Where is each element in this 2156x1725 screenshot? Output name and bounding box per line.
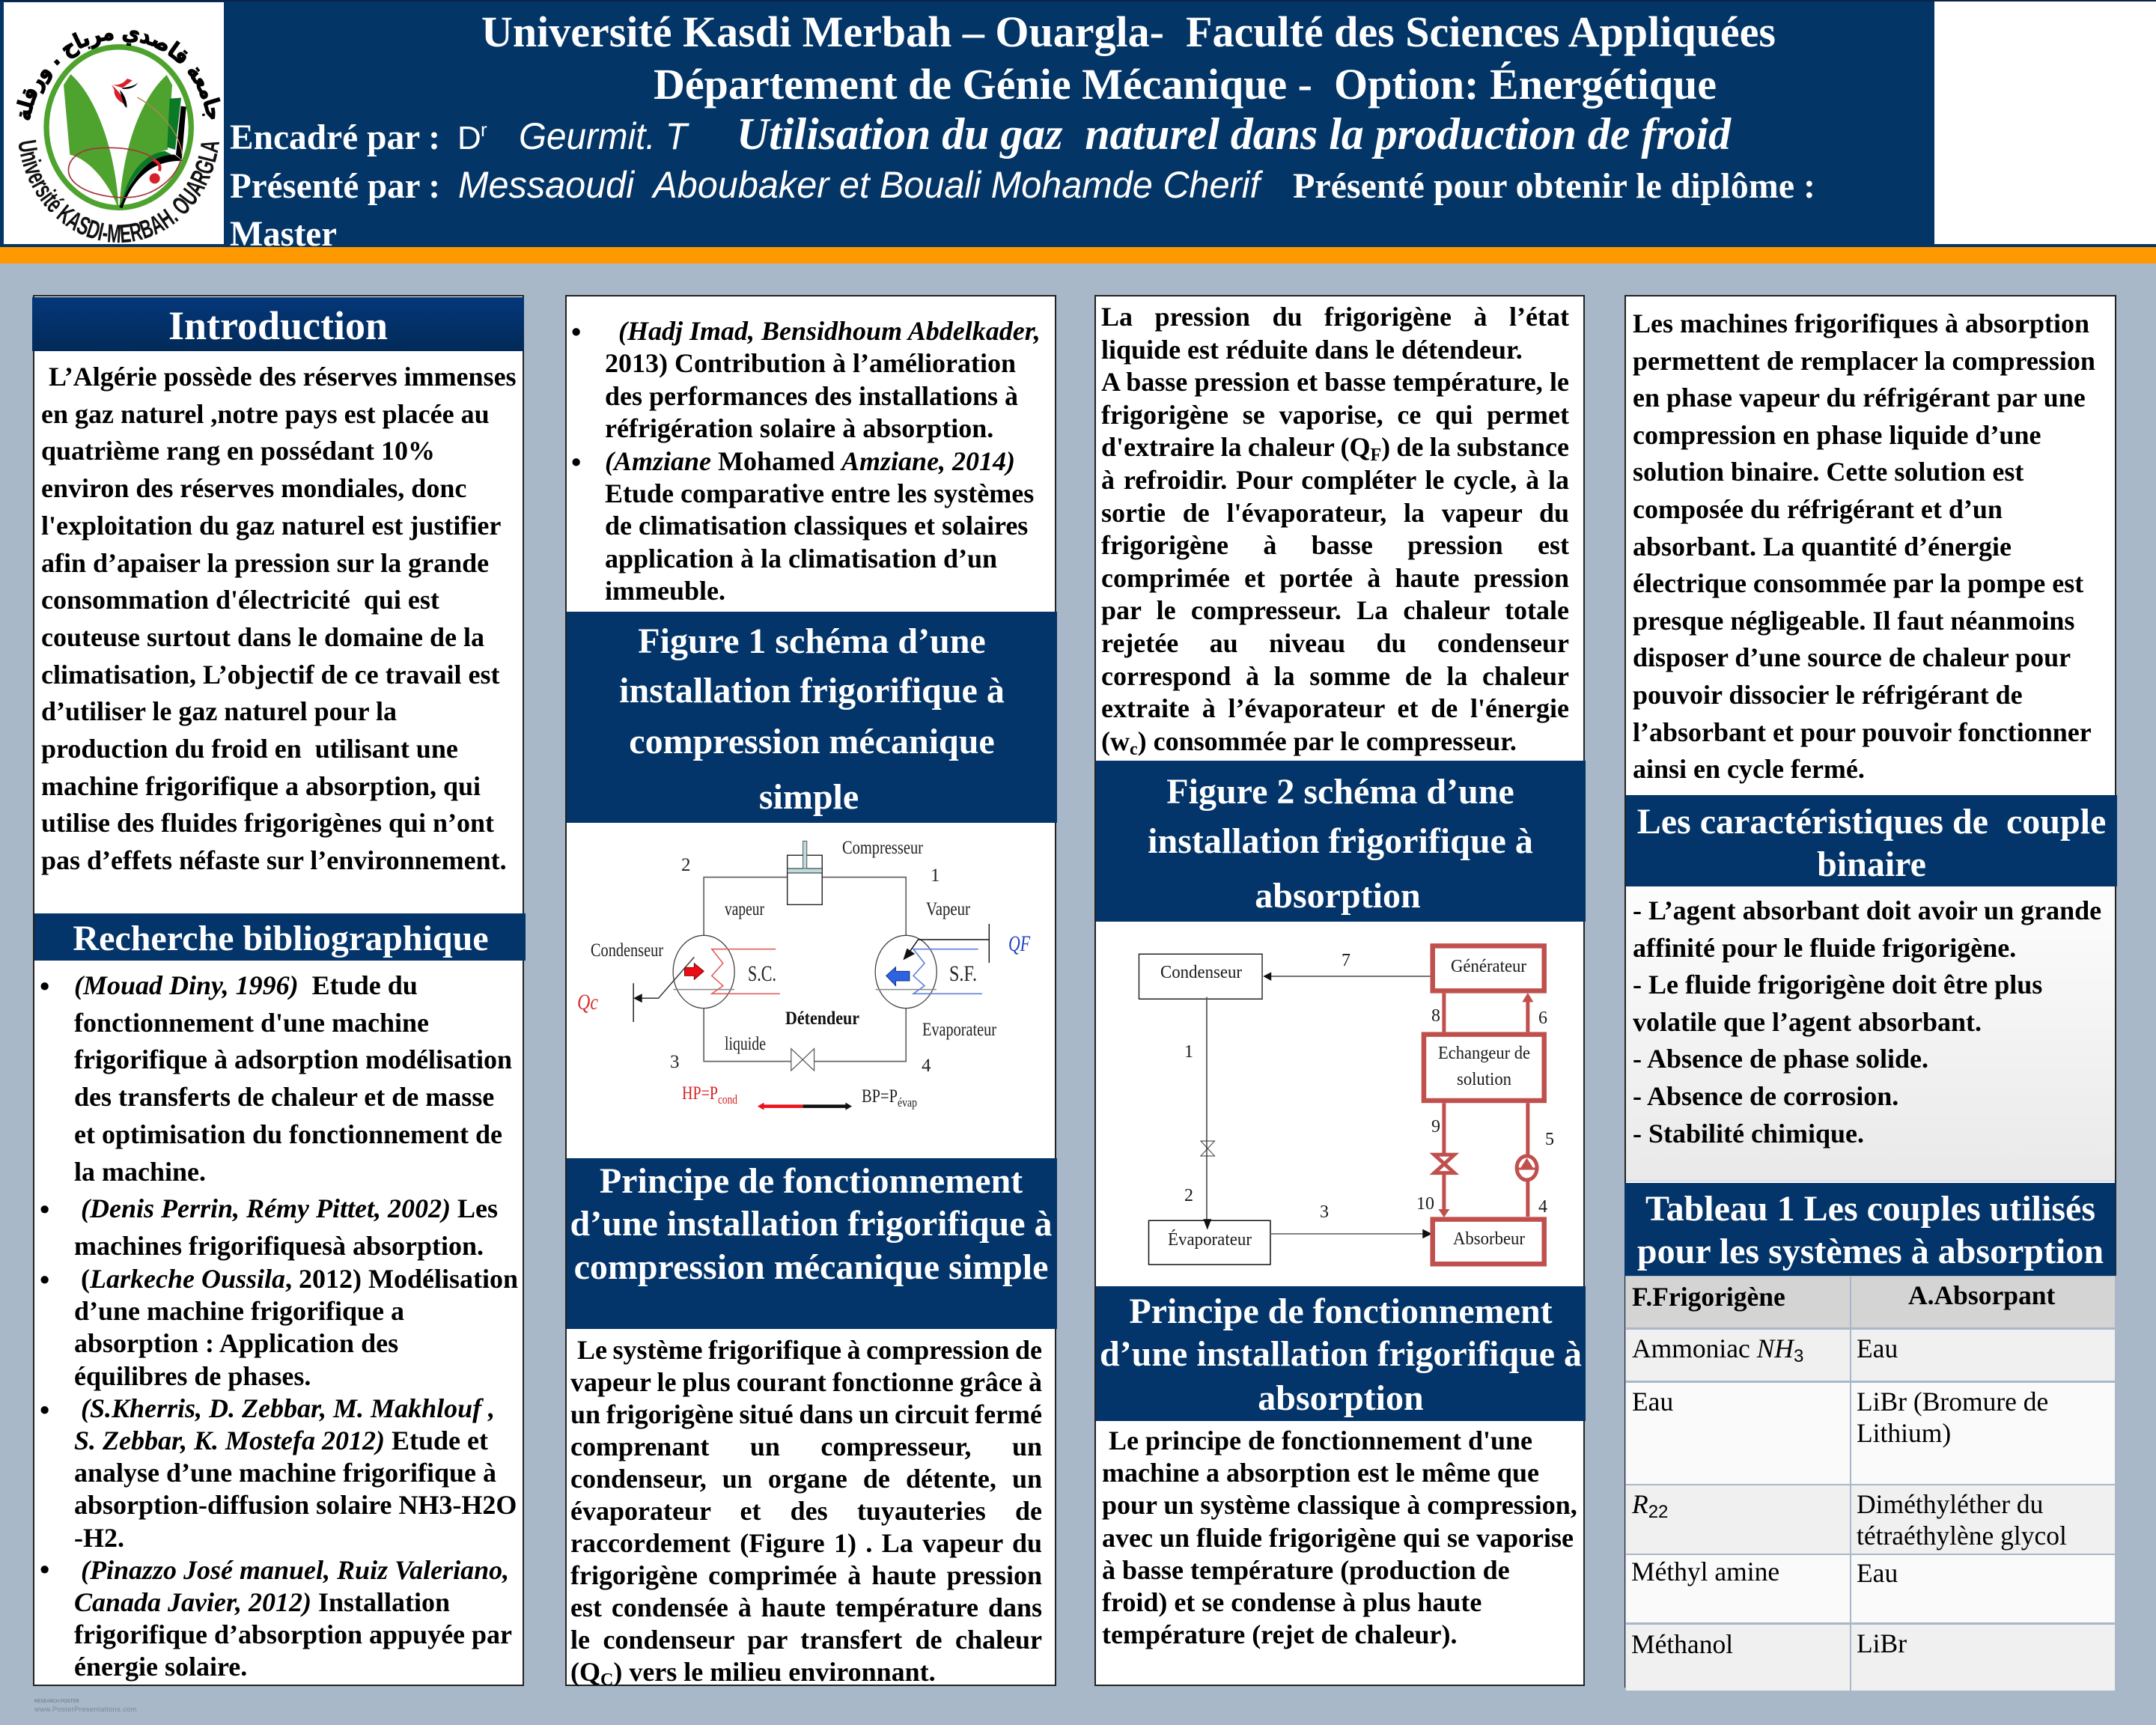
text: introduction paragraph: l'exploitation du gaz naturel est justifier (41, 511, 501, 541)
table: refrigerant and absorbent couples: Eau (1857, 1558, 1898, 1588)
diagram: absorption refrigeration installation: 3 (1320, 1202, 1329, 1222)
text: principle of absorption: Le principe de fonctionnement d'une (1109, 1426, 1532, 1455)
text: introduction paragraph: afin d’apaiser la pression sur la grande (41, 548, 489, 578)
text: references continued: (Amziane Mohamed Amziane, 2014) (605, 446, 1015, 476)
text: absorption machines: disposer d’une source de chaleur pour (1633, 642, 2071, 672)
heading: Introduction: Introduction (168, 303, 388, 348)
table: refrigerant and absorbent couples: Diméthyléther du (1857, 1489, 2043, 1519)
text: introduction paragraph: couteuse surtout dans le domaine de la (41, 622, 484, 652)
text: references continued: des performances des installations à (605, 381, 1018, 411)
text: bibliography references part 1: fonctionnement d'une machine (74, 1008, 429, 1038)
text: principle of compression: est condensée à haute température dans (570, 1592, 1042, 1622)
text: bibliography references part 2: absorption-diffusion solaire NH3-H2O (74, 1490, 517, 1520)
text: binary couple characteristics: - Absence de corrosion. (1633, 1081, 1898, 1111)
heading: Principe compression: d’une installation frigorifique à (570, 1204, 1053, 1244)
diagram: compression refrigeration installation: Compresseur (842, 838, 924, 858)
text: principle of absorption: température (rejet de chaleur). (1102, 1619, 1457, 1649)
text: absorption machines: absorbant. La quantité d’énergie (1633, 532, 2012, 562)
text: principle of absorption: pour un système classique à compression, (1102, 1490, 1577, 1520)
text: refrigeration cycle: A basse pression et basse température, le (1101, 367, 1569, 397)
text: binary couple characteristics: affinité pour le fluide frigorigène. (1633, 933, 2016, 963)
text: bibliography references part 1: machines frigorifiquesà absorption. (74, 1231, 484, 1261)
text: bibliography references part 2: équilibres de phases. (74, 1361, 311, 1391)
text: principle of absorption: à basse température (production de (1102, 1555, 1510, 1585)
table: refrigerant and absorbent couples: Méthyl amine (1631, 1557, 1779, 1586)
text: refrigeration cycle: frigorigène se vaporise, ce qui permet (1101, 400, 1569, 430)
text: refrigeration cycle: rejetée au niveau du condenseur (1101, 628, 1569, 658)
header text lines: Utilisation du gaz naturel dans la production de froid (737, 109, 1732, 159)
text: refrigeration cycle: sortie de l'évaporateur, la vapeur du (1101, 498, 1569, 528)
text: bibliography references part 2: analyse d’une machine frigorifique à (74, 1458, 496, 1488)
bullets: references: • (571, 317, 581, 348)
text: refrigeration cycle: (wc) consommée par le compresseur. (1101, 726, 1517, 759)
text: bibliography references part 2 (74, 1264, 518, 1682)
text: absorption machines: presque négligeable. Il faut néanmoins (1633, 606, 2074, 636)
heading: Figure 1: Figure 1 schéma d’une (638, 621, 986, 661)
text: references continued (605, 316, 1041, 606)
table: refrigerant and absorbent couples: LiBr (Bromure de (1857, 1387, 2048, 1417)
text: introduction paragraph: consommation d'électricité qui est (41, 585, 439, 615)
table: refrigerant and absorbent couples: Ammoniac NH3 (1632, 1333, 1803, 1366)
text: absorption machines: Les machines frigorifiques à absorption (1633, 308, 2089, 338)
bullets: bibliography markers: • (40, 971, 49, 1003)
header text lines: Présenté pour obtenir le diplôme : (1293, 166, 1815, 206)
text: binary couple characteristics: - L’agent absorbant doit avoir un grande (1633, 895, 2101, 925)
header text lines: r (481, 118, 487, 141)
text: binary couple characteristics (1626, 886, 2115, 1181)
bullets: bibliography markers: • (40, 1554, 49, 1586)
text: introduction paragraph: production du froid en utilisant une (41, 734, 458, 764)
footer: poster credit: www.PosterPresentations.com (34, 1706, 137, 1714)
heading: Figure 2: Figure 2 schéma d’une (1166, 772, 1514, 812)
text: introduction paragraph: en gaz naturel ,notre pays est placée au (41, 399, 490, 429)
footer: poster credit (34, 1700, 137, 1714)
text: principle of absorption: froid) et se condense à plus haute (1102, 1587, 1482, 1617)
diagram: absorption refrigeration installation: 2 (1184, 1186, 1193, 1205)
text: introduction paragraph: machine frigorifique a absorption, qui (41, 771, 481, 801)
table: refrigerant and absorbent couples: Eau (1632, 1387, 1673, 1417)
bullets: references: • (571, 447, 581, 478)
diagram: absorption refrigeration installation: 4 (1538, 1197, 1547, 1217)
diagram: compression refrigeration installation: évap (898, 1095, 917, 1110)
text: refrigeration cycle: par le compresseur. La chaleur totale (1101, 595, 1569, 625)
text: bibliography references part 2: (Pinazzo José manuel, Ruiz Valeriano, (81, 1555, 509, 1585)
heading: Tableau 1 (1624, 1183, 2116, 1276)
text: refrigeration cycle: correspond à la somme de la chaleur (1101, 661, 1569, 691)
text: principle of compression: comprenant un compresseur, un (570, 1432, 1042, 1461)
text: introduction paragraph: quatrième rang en possédant 10% (41, 436, 435, 466)
diagram: absorption refrigeration installation: 5 (1545, 1130, 1554, 1149)
bullets: references (571, 317, 581, 478)
diagram: compression refrigeration installation: cond (718, 1092, 737, 1107)
bullets: bibliography markers: • (40, 1194, 49, 1226)
text: absorption machines: ainsi en cycle fermé. (1633, 754, 1865, 784)
panel: figure 1 compression (565, 295, 1056, 1686)
text: refrigeration cycle: La pression du frigorigène à l’état (1101, 302, 1569, 332)
text: bibliography references part 2: (Larkeche Oussila, 2012) Modélisation (81, 1264, 518, 1294)
text: principle of compression: (QC) vers le milieu environnant. (570, 1657, 936, 1690)
diagram: compression refrigeration installation: 2 (681, 855, 690, 875)
diagram: absorption refrigeration installation: 10 (1416, 1194, 1434, 1214)
text: principle of absorption (1102, 1426, 1577, 1649)
text: bibliography references part 1: frigorifique à adsorption modélisation (74, 1044, 512, 1074)
panel: binary couple and table (1624, 295, 2116, 1688)
text: references continued: immeuble. (605, 576, 725, 606)
header text lines: Messaoudi Aboubaker et Bouali Mohamde Cherif (458, 164, 1264, 206)
heading: Figure 2 (1096, 761, 1586, 922)
heading: Principe compression: Principe de fonctionnement (600, 1161, 1023, 1201)
diagram: compression refrigeration installation: QF (1008, 931, 1030, 956)
diagram: absorption refrigeration installation: Echangeur de (1438, 1044, 1530, 1063)
heading: Recherche bibliographique: Recherche bibliographique (73, 919, 489, 958)
logo: Université Kasdi Merbah Ouargla: جامعة قاصدي مرباح . ورقلة (16, 30, 221, 121)
text: bibliography references part 2: S. Zebbar, K. Mostefa 2012) Etude et (74, 1426, 488, 1455)
text: bibliography references part 2: énergie solaire. (74, 1652, 247, 1682)
heading: Figure 1 (567, 612, 1057, 823)
text: references continued: application à la climatisation d’un (605, 544, 997, 574)
text: references continued: (Hadj Imad, Bensidhoum Abdelkader, (618, 316, 1041, 346)
text: references continued: 2013) Contribution à l’amélioration (605, 348, 1016, 378)
text: introduction paragraph: L’Algérie possède des réserves immenses (49, 362, 517, 392)
header text lines: Encadré par : (230, 118, 440, 157)
text: bibliography references part 2: frigorifique d’absorption appuyée par (74, 1619, 512, 1649)
diagram: compression refrigeration installation: Vapeur (926, 899, 971, 919)
text: principle of compression (570, 1335, 1042, 1690)
heading: Principe absorption (1096, 1286, 1586, 1421)
text: principle of compression: Le système frigorifique à compression de (577, 1335, 1042, 1365)
text: introduction paragraph: pas d’effets néfaste sur l’environnement. (41, 845, 507, 875)
diagram: compression refrigeration installation: Qc (577, 990, 598, 1014)
text: refrigeration cycle: liquide est réduite dans le détendeur. (1101, 335, 1523, 365)
header text lines: Présenté par : (230, 166, 440, 206)
header text lines: Geurmit. T (519, 115, 689, 157)
heading: Introduction (32, 297, 524, 351)
bullets: bibliography markers: • (40, 1395, 49, 1426)
text: refrigeration cycle: à refroidir. Pour compléter le cycle, à la (1101, 465, 1569, 495)
diagram: absorption refrigeration installation: 1 (1184, 1042, 1193, 1062)
table: refrigerant and absorbent couples: LiBr (1857, 1628, 1907, 1658)
header text lines: Université Kasdi Merbah – Ouargla- Faculté des Sciences Appliquées (481, 7, 1776, 56)
header banner (0, 0, 2156, 247)
logo: Université Kasdi Merbah Ouargla (4, 2, 224, 244)
diagram: absorption refrigeration installation: 7 (1342, 951, 1350, 970)
text: bibliography references part 1: la machine. (74, 1157, 206, 1187)
text: principle of compression: frigorigène comprimée à haute pression (570, 1560, 1042, 1590)
text: absorption machines: en phase vapeur du réfrigérant par une (1633, 383, 2086, 413)
diagram: absorption refrigeration installation: Condenseur (1160, 963, 1242, 982)
text: absorption machines (1633, 308, 2095, 784)
diagram: absorption refrigeration installation: Évaporateur (1168, 1230, 1252, 1250)
text: principle of compression: vapeur le plus courant fonctionne grâce à (570, 1367, 1042, 1397)
diagram: compression refrigeration installation: Détendeur (785, 1008, 859, 1029)
heading: Figure 1: simple (759, 777, 859, 817)
table: refrigerant and absorbent couples: F.Frigorigène (1632, 1282, 1785, 1312)
table: refrigerant and absorbent couples: R22 (1632, 1489, 1668, 1522)
heading: Principe absorption: d’une installation frigorifique à (1100, 1334, 1582, 1374)
text: principle of absorption: machine a absorption est le même que (1102, 1458, 1539, 1488)
text: absorption machines: pouvoir dissocier le réfrigérant de (1633, 680, 2023, 710)
text: principle of compression: le condenseur par transfert de chaleur (570, 1625, 1042, 1655)
heading: Les caractéristiques (1626, 795, 2117, 886)
text: bibliography references part 2: -H2. (74, 1523, 124, 1553)
panel: introduction and bibliography (33, 295, 524, 1686)
text: binary couple characteristics: volatile que l’agent absorbant. (1633, 1007, 1982, 1037)
text: refrigeration cycle: d'extraire la chaleur (QF) de la substance (1101, 432, 1569, 465)
text: introduction paragraph: d’utiliser le gaz naturel pour la (41, 696, 397, 726)
panel: figure 2 absorption (1094, 295, 1585, 1686)
header text lines: D (457, 120, 481, 156)
diagram: absorption refrigeration installation: 6 (1538, 1008, 1547, 1028)
header text lines: Département de Génie Mécanique - Option: Énergétique (654, 60, 1717, 109)
diagram: compression refrigeration installation: S.F. (949, 961, 977, 986)
text: introduction paragraph: utilise des fluides frigorigènes qui n’ont (41, 808, 494, 838)
text: principle of absorption: avec un fluide frigorigène qui se vaporise (1102, 1523, 1574, 1553)
text: bibliography references part 1: (Mouad Diny, 1996) Etude du (74, 970, 418, 1000)
text: bibliography references part 1: et optimisation du fonctionnement de (74, 1119, 502, 1149)
diagram: compression refrigeration installation: HP=P (682, 1083, 718, 1104)
table: refrigerant and absorbent couples: Lithium) (1857, 1418, 1951, 1448)
diagram: compression refrigeration installation: Evaporateur (922, 1020, 997, 1040)
text: refrigeration cycle: extraite à l’évaporateur et de l'énergie (1101, 693, 1569, 723)
bullets: bibliography markers (40, 971, 49, 1586)
text: bibliography references part 1: des transferts de chaleur et de masse (74, 1082, 494, 1112)
bullets: bibliography markers: • (40, 1265, 49, 1296)
heading: Tableau 1: pour les systèmes à absorption (1637, 1232, 2104, 1271)
text: introduction paragraph: climatisation, L’objectif de ce travail est (41, 660, 500, 690)
text: bibliography references part 2: Canada Javier, 2012) Installation (74, 1587, 450, 1617)
text: bibliography references part 1: (Denis Perrin, Rémy Pittet, 2002) Les (81, 1193, 498, 1223)
diagram: absorption refrigeration installation: Absorbeur (1453, 1229, 1525, 1249)
text: references continued: de climatisation classiques et solaires (605, 511, 1028, 541)
text: absorption machines: l’absorbant et pour pouvoir fonctionner (1633, 717, 2092, 747)
diagram: compression refrigeration installation: Condenseur (591, 940, 664, 961)
text: absorption machines: composée du réfrigérant et d’un (1633, 494, 2003, 524)
heading: Principe compression: compression mécanique simple (574, 1247, 1048, 1287)
text: refrigeration cycle: comprimée et portée à haute pression (1101, 563, 1569, 593)
heading: Figure 1: compression mécanique (629, 722, 995, 761)
text: absorption machines: permettent de remplacer la compression (1633, 346, 2095, 376)
text: absorption machines: solution binaire. Cette solution est (1633, 457, 2023, 487)
text: references continued: réfrigération solaire à absorption. (605, 413, 993, 443)
white box at top right (1934, 1, 2156, 244)
diagram: compression refrigeration installation: BP=P (862, 1086, 898, 1107)
diagram: absorption refrigeration installation: 9 (1431, 1117, 1440, 1137)
heading: Principe compression (567, 1158, 1057, 1329)
diagram: compression refrigeration installation: S.C. (748, 961, 776, 986)
table: refrigerant and absorbent couples: tétraéthylène glycol (1857, 1521, 2067, 1551)
footer: poster credit: RESEARCH POSTER (34, 1700, 79, 1704)
heading: Figure 2: absorption (1255, 876, 1421, 916)
heading: Figure 1: installation frigorifique à (619, 671, 1005, 711)
diagram: compression refrigeration installation: vapeur (725, 899, 765, 919)
text: introduction paragraph: environ des réserves mondiales, donc (41, 473, 466, 503)
diagram: absorption refrigeration installation: 8 (1431, 1006, 1440, 1026)
text: principle of compression: évaporateur et des tuyauteries de (570, 1496, 1042, 1526)
diagram: compression refrigeration installation: 3 (670, 1052, 680, 1072)
diagram: absorption refrigeration installation: solution (1457, 1070, 1511, 1089)
text: bibliography references part 2: absorption : Application des (74, 1328, 398, 1358)
text: binary couple characteristics: - Le fluide frigorigène doit être plus (1633, 970, 2042, 1000)
diagram: absorption refrigeration installation: Générateur (1451, 957, 1526, 976)
text: refrigeration cycle (1101, 302, 1569, 759)
text: bibliography references part 2: d’une machine frigorifique a (74, 1296, 404, 1326)
text: binary couple characteristics: - Stabilité chimique. (1633, 1119, 1864, 1149)
heading: Principe absorption: absorption (1258, 1378, 1424, 1418)
heading: Tableau 1: Tableau 1 Les couples utilisés (1645, 1189, 2095, 1229)
text: principle of compression: condenseur, un organe de détente, un (570, 1464, 1042, 1494)
text: references continued: Etude comparative entre les systèmes (605, 478, 1034, 508)
orange divider bar (0, 247, 2156, 264)
table: refrigerant and absorbent couples (1625, 1276, 2116, 1692)
table: refrigerant and absorbent couples: Méthanol (1631, 1629, 1733, 1659)
text: bibliography references part 1 (74, 970, 512, 1261)
diagram: compression refrigeration installation: 4 (922, 1056, 931, 1076)
heading: Les caractéristiques: binaire (1817, 845, 1926, 884)
text: introduction paragraph (41, 362, 517, 875)
table: refrigerant and absorbent couples: A.Absorpant (1908, 1280, 2055, 1310)
text: binary couple characteristics: - Absence de phase solide. (1633, 1044, 1928, 1074)
text: bibliography references part 2: (S.Kherris, D. Zebbar, M. Makhlouf , (81, 1393, 495, 1423)
heading: Figure 2: installation frigorifique à (1148, 821, 1533, 861)
diagram: compression refrigeration installation: 1 (931, 865, 940, 886)
diagram: compression refrigeration installation: liquide (725, 1034, 766, 1054)
text: refrigeration cycle: frigorigène à basse pression est (1101, 530, 1569, 560)
text: absorption machines: compression en phase liquide d’une (1633, 420, 2041, 450)
text: absorption machines: électrique consommée par la pompe est (1633, 568, 2083, 598)
heading: Principe absorption: Principe de fonctionnement (1129, 1292, 1553, 1331)
diagram: compression refrigeration installation (577, 838, 1030, 1110)
header text lines (230, 7, 1815, 249)
heading: Les caractéristiques: Les caractéristiques de couple (1637, 802, 2106, 842)
text: principle of compression: raccordement (Figure 1) . La vapeur du (570, 1528, 1042, 1558)
table: refrigerant and absorbent couples: Eau (1857, 1333, 1898, 1363)
diagram: absorption refrigeration installation (1138, 943, 1554, 1267)
text: principle of compression: un frigorigène situé dans un circuit fermé (570, 1399, 1042, 1429)
